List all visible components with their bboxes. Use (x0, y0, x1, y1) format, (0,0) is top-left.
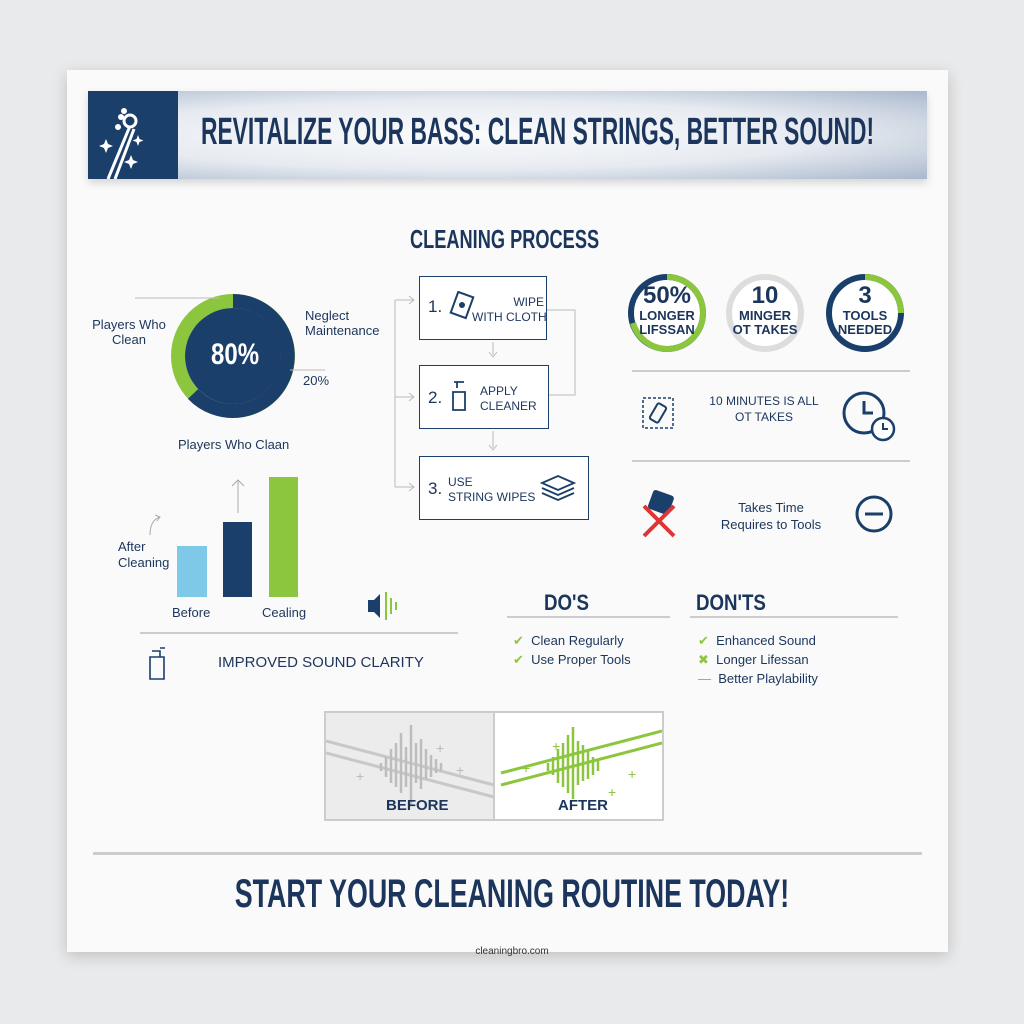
process flow (394, 276, 589, 520)
don'ts (690, 590, 898, 686)
takes time row: Requires to Tools (721, 517, 821, 532)
before / after waveform (324, 711, 664, 821)
donut chart: Maintenance (305, 323, 379, 338)
step 2: APPLY (480, 384, 518, 398)
footer: cleaningbro.com (475, 946, 549, 957)
donut chart: Neglect (305, 308, 349, 323)
sound clarity: IMPROVED SOUND CLARITY (218, 654, 424, 671)
before / after waveform: + (552, 738, 560, 754)
call to action: START YOUR CLEANING ROUTINE TODAY! (235, 872, 789, 916)
10 minutes row: OT TAKES (735, 410, 793, 424)
bar chart: After (118, 539, 145, 554)
don'ts: — Better Playlability (698, 671, 818, 686)
before / after waveform: + (356, 768, 364, 784)
card (67, 70, 948, 952)
bar chart: Before (172, 605, 210, 620)
step 2: CLEANER (480, 399, 537, 413)
bar chart: Cleaning (118, 555, 169, 570)
before / after waveform: + (436, 740, 444, 756)
stat circles: NEEDED (838, 322, 892, 337)
divider line (140, 632, 458, 634)
bar chart (118, 477, 306, 620)
takes time row: Takes Time (738, 500, 804, 515)
don'ts: DON'TS (696, 590, 766, 615)
before / after waveform: + (608, 784, 616, 800)
step 3: STRING WIPES (448, 490, 535, 504)
sound clarity (149, 647, 424, 680)
stat circles: TOOLS (843, 308, 887, 323)
header banner (88, 91, 927, 179)
donut chart: 20% (303, 373, 329, 388)
step 2 (419, 365, 549, 429)
icon: speaker (368, 592, 397, 620)
step 1: 1. (428, 297, 442, 316)
stat circles (628, 274, 904, 352)
takes time row (642, 490, 892, 538)
step 3: 3. (428, 479, 442, 498)
bottom divider (93, 852, 922, 855)
step 1: WIPE (513, 295, 544, 309)
donut chart: Players Who Clean (92, 317, 166, 347)
stat circles: 10 (752, 282, 778, 309)
before / after waveform: BEFORE (386, 797, 449, 814)
bar chart: Ϲealing (262, 605, 306, 620)
donut chart: 80% (211, 338, 259, 371)
before / after waveform: + (456, 762, 464, 778)
stat circles: 3 (858, 282, 872, 309)
step 1 (419, 276, 547, 340)
step 3: USE (448, 475, 473, 489)
step 3 (419, 456, 589, 520)
do's: DO'S (544, 590, 589, 615)
before / after waveform: AFTER (558, 797, 608, 814)
heading: cleaning process: CLEANING PROCESS (410, 224, 599, 254)
step 2: 2. (428, 388, 442, 407)
do's: ✔ Clean Regularly (513, 633, 624, 648)
do's: ✔ Use Proper Tools (513, 652, 631, 667)
title: REVITALIZE YOUR BASS: CLEAN STRINGS, BETTER SOUND! (201, 111, 874, 153)
don'ts: ✔ Enhanced Sound (698, 633, 816, 648)
stat circles: LONGER (639, 308, 695, 323)
before / after waveform: + (628, 766, 636, 782)
don'ts: ✖ Longer Lifessan (698, 652, 809, 667)
do's (507, 590, 670, 667)
donut chart: Players Who Clаan (178, 437, 289, 452)
10 minutes row: 10 MINUTES IS ALL (709, 394, 819, 408)
before / after waveform: + (522, 760, 530, 776)
stat circles: OT TAKES (733, 322, 797, 337)
stat circles: 50% (643, 282, 691, 309)
stat circles: LIFSSAN (639, 322, 695, 337)
donut chart (92, 294, 379, 452)
10 minutes row (642, 392, 896, 442)
icon: bass headstock (88, 91, 178, 179)
stat circles: MINGER (739, 308, 791, 323)
step 1: WITH CLOTH (472, 310, 547, 324)
